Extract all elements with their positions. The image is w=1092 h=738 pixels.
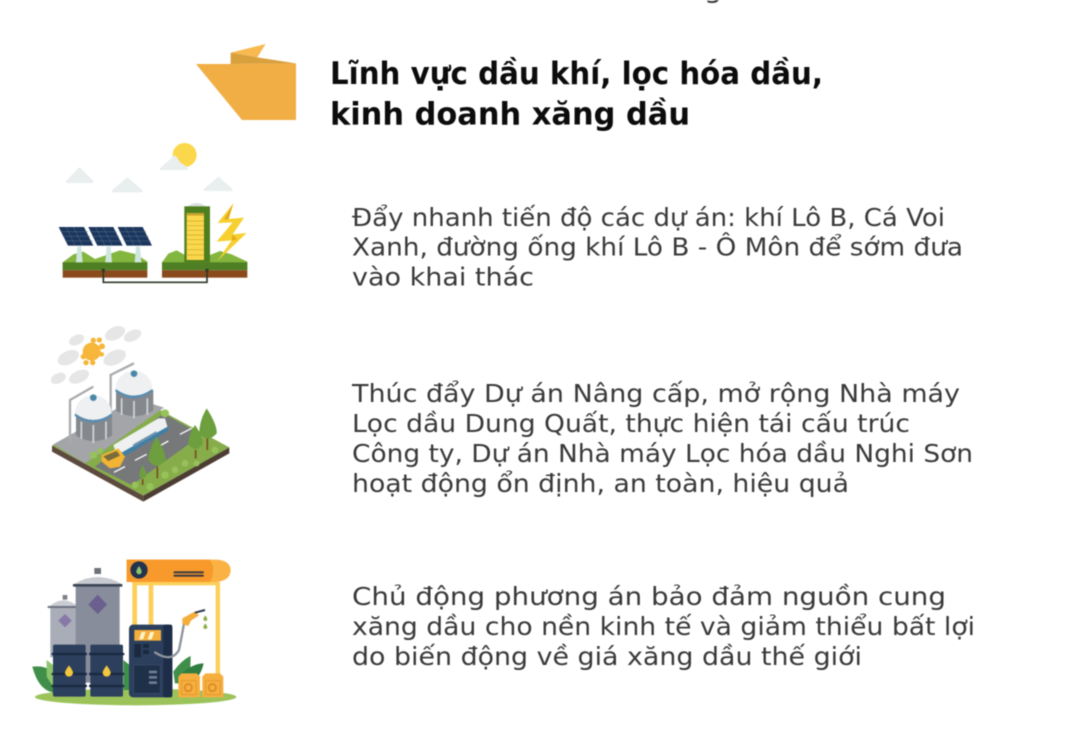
pipes bbox=[70, 363, 134, 443]
text: gas projects: vào khai thác bbox=[352, 262, 534, 292]
base platform bbox=[52, 398, 229, 496]
plant pad bbox=[53, 398, 164, 463]
tank colonnades bbox=[76, 415, 112, 441]
text: fuel supply: xăng dầu cho nền kinh tế và giảm thiểu bất lợi bbox=[352, 612, 975, 641]
text: fuel supply: do biến động về giá xăng dầu thế giới bbox=[352, 642, 862, 671]
sun bbox=[173, 143, 197, 167]
canopy columns bbox=[132, 582, 220, 679]
ground left bbox=[63, 250, 147, 270]
canopy bbox=[127, 560, 231, 582]
road bbox=[95, 413, 202, 485]
text: gas projects: Xanh, đường ống khí Lô B - Ô Môn để sớm đưa bbox=[352, 232, 963, 262]
text: fuel supply: Chủ động phương án bảo đảm nguồn cung bbox=[352, 582, 946, 611]
tanker truck bbox=[113, 418, 168, 455]
big tank bbox=[74, 577, 122, 584]
text: refinery projects: Thúc đẩy Dự án Nâng cấp, mở rộng Nhà máy bbox=[351, 379, 960, 408]
text: fuel supply bbox=[352, 582, 975, 671]
fuel pump bbox=[129, 625, 172, 697]
title bbox=[330, 55, 823, 132]
clouds bbox=[67, 169, 231, 191]
trees bbox=[139, 408, 217, 478]
text: gas projects: Đẩy nhanh tiến độ các dự án: khí Lô B, Cá Voi bbox=[352, 203, 945, 232]
icon: fuel station with tanks and barrels bbox=[32, 560, 236, 705]
solar panels bbox=[59, 227, 152, 246]
text: refinery projects: Lọc dầu Dung Quất, thực hiện tái cấu trúc bbox=[352, 409, 910, 438]
hose and nozzle bbox=[154, 622, 184, 657]
ground right bbox=[162, 250, 247, 270]
title: Lĩnh vực dầu khí, lọc hóa dầu, bbox=[330, 55, 823, 92]
flare bbox=[81, 337, 105, 365]
text: gas projects bbox=[352, 203, 963, 292]
barrels bbox=[53, 645, 123, 697]
small tank bbox=[49, 600, 78, 607]
icon: solar panels and battery bbox=[59, 143, 247, 282]
text: refinery projects: Công ty, Dự án Nhà máy Lọc hóa dầu Nghi Sơn bbox=[352, 439, 973, 468]
icon: folded orange ribbon bbox=[196, 44, 296, 120]
leaves bbox=[32, 656, 204, 693]
smoke clouds bbox=[49, 323, 143, 387]
battery bbox=[187, 203, 207, 207]
jerry cans bbox=[178, 673, 223, 697]
shrubs bbox=[90, 409, 218, 490]
panel supports bbox=[76, 247, 141, 262]
lightning bbox=[217, 203, 247, 261]
text: refinery projects: hoạt động ổn định, an toàn, hiệu quả bbox=[352, 469, 849, 498]
title: kinh doanh xăng dầu bbox=[330, 96, 690, 132]
ground bbox=[35, 689, 236, 705]
text: refinery projects bbox=[351, 379, 973, 498]
connector wire bbox=[103, 270, 207, 282]
tank domes bbox=[75, 395, 112, 420]
icon: refinery with tanker truck bbox=[49, 323, 229, 502]
